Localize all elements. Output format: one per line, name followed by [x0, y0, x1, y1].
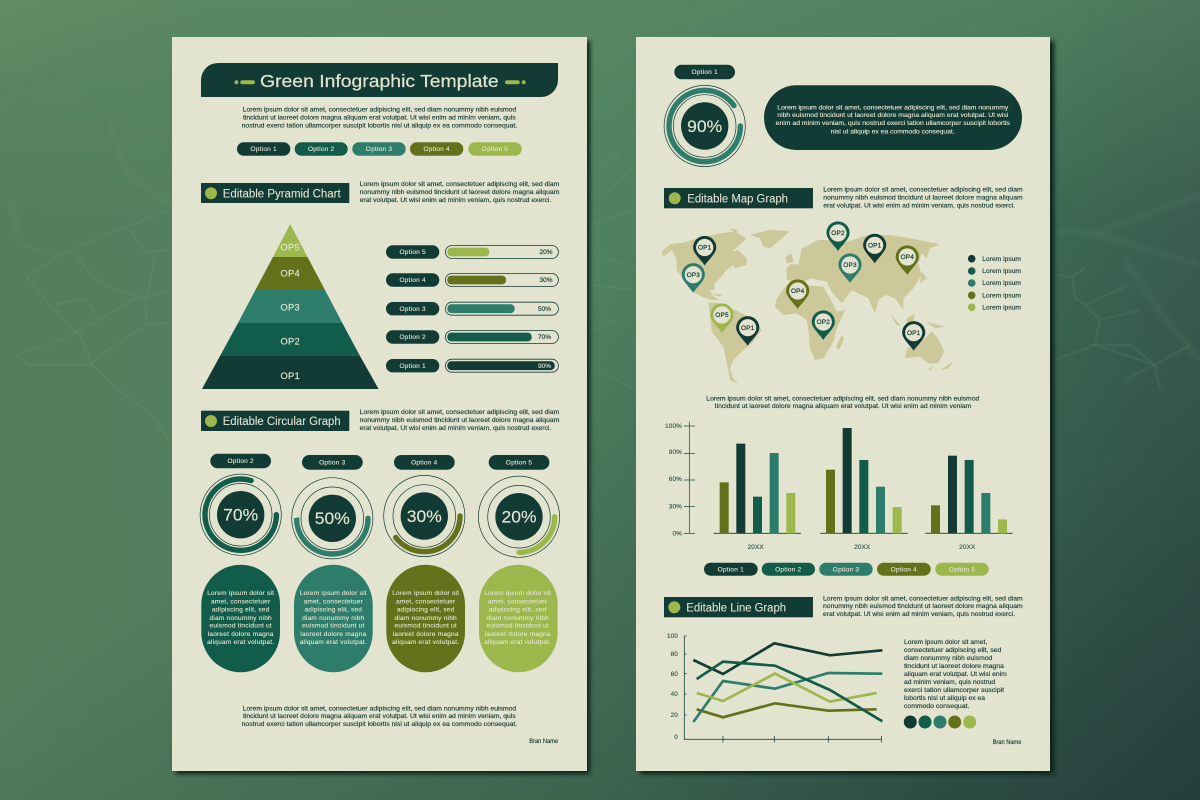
text capsule: teal: [294, 565, 373, 672]
pyramid description: nonummy nibh euismod tincidunt ut laoreet dolore magna aliquam: [360, 189, 559, 196]
text capsule: olive: adipiscing elit, sed: [397, 607, 455, 614]
text capsule: olive: aliquam erat volutpat.: [392, 639, 459, 646]
option legend row: Option 3: [366, 146, 392, 153]
dark text capsule: Lorem ipsum dolor sit amet, consectetuer adipiscing elit, sed diam nonummy: [777, 104, 1009, 111]
map pin: OP1 siberia: OP1: [868, 243, 882, 250]
circular gauge: option 4: Option 4: [411, 460, 438, 466]
closing text: tincidunt ut laoreet dolore magna aliquam erat volutpat. Ut wisi enim ad minim veniam, quis: [243, 713, 516, 720]
map description: [823, 186, 1023, 210]
bar chart option legend: Option 1: [718, 566, 744, 573]
map description: nonummy nibh euismod tincidunt ut laoreet dolore magna aliquam: [823, 194, 1023, 202]
text capsule: teal: adipiscing elit, sed: [304, 607, 362, 614]
circular gauge: option 5: 20%: [502, 509, 537, 527]
text capsule: teal: amet, consectetuer: [304, 598, 364, 605]
text capsule: lime: laoreet dolore magna: [485, 631, 551, 638]
map legend: Lorem ipsum: [982, 304, 1021, 312]
line graph side text: lobortis nisl ut aliquip ex ea: [904, 695, 985, 702]
line graph: 80: [671, 651, 678, 658]
bar chart option legend: [704, 563, 989, 576]
progress bars: Option 4: [399, 277, 426, 284]
brand name right: Bran Name: [993, 739, 1022, 746]
map pin: OP2 russia west: [826, 221, 850, 251]
bar chart option legend: Option 5: [949, 566, 975, 573]
map pin: OP1 australia: [902, 321, 925, 351]
bar chart: 60%: [669, 476, 682, 483]
map description: erat volutpat. Ut wisi enim ad minim veniam, quis nostrud exerci.: [823, 202, 1015, 210]
map pin: OP3 central asia: OP3: [843, 262, 857, 269]
line graph side text: diam nonummy nibh euismod: [904, 655, 993, 662]
line graph description: nonummy nibh euismod tincidunt ut laoreet dolore magna aliquam: [823, 603, 1023, 610]
text capsule: lime: euismod tincidunt ut: [486, 623, 549, 630]
world map: [662, 228, 953, 383]
circular description: erat volutpat. Ut wisi enim ad minim veniam, quis nostrud exerci.: [360, 425, 551, 432]
text capsule: lime: amet, consectetuer: [488, 598, 548, 605]
circular gauge: option 2: 70%: [223, 507, 259, 525]
line graph side text: [904, 639, 1007, 710]
text capsule: dark green: [201, 565, 280, 672]
text capsule: olive: amet, consectetuer: [396, 598, 456, 605]
line graph: 0: [674, 734, 678, 741]
closing text: [242, 705, 517, 728]
map pin: OP1 australia: OP1: [907, 330, 921, 337]
text capsule: dark green: amet, consectetuer: [211, 598, 271, 605]
line graph: [667, 633, 882, 742]
circular description: nonummy nibh euismod tincidunt ut laoreet dolore magna aliquam: [360, 417, 559, 424]
page 1 shadow: [176, 41, 590, 774]
circular gauge: option 2: [200, 454, 281, 555]
line graph side text: exerci tation ullamcorper suscipit: [904, 687, 1004, 694]
text capsule: dark green: Lorem ipsum dolor sit: [207, 590, 274, 597]
progress bars: 70%: [538, 334, 551, 341]
circular gauge: option 1: Option 1: [691, 69, 718, 76]
circular gauge: option 5: Option 5: [506, 460, 532, 466]
map description: Lorem ipsum dolor sit amet, consectetuer adipiscing elit, sed diam: [823, 186, 1023, 194]
map pin: OP4 north africa: [786, 279, 809, 309]
text capsule: dark green: aliquam erat volutpat.: [207, 639, 274, 646]
pyramid chart: [202, 224, 379, 389]
circular gauge: option 2: Option 2: [227, 458, 254, 465]
text capsule: lime: [479, 565, 558, 672]
text capsule: dark green: laoreet dolore magna: [208, 631, 274, 638]
progress bars: Option 2: [399, 334, 426, 341]
option legend row: [237, 142, 522, 156]
heading: pyramid chart: [201, 183, 349, 203]
text capsule: olive: Lorem ipsum dolor sit: [392, 590, 459, 597]
circular description: Lorem ipsum dolor sit amet, consectetuer adipiscing elit, sed diam: [360, 409, 559, 416]
option legend row: Option 4: [423, 146, 450, 153]
text capsule: olive: laoreet dolore magna: [393, 631, 459, 638]
line graph: 20: [671, 712, 678, 719]
text capsule: olive: diam nonummy nibh: [394, 615, 457, 622]
circular gauge: option 5: [478, 455, 560, 557]
map pin: OP3 west america: OP3: [687, 272, 700, 279]
brand name left: Bran Name: [529, 738, 558, 745]
line graph description: erat volutpat. Ut wisi enim ad minim veniam, quis nostrud exerci.: [823, 611, 1015, 618]
progress bars: Option 1: [399, 363, 426, 370]
closing text: Lorem ipsum dolor sit amet, consectetuer adipiscing elit, sed diam nonummy nibh euismod: [243, 705, 517, 712]
line graph: 60: [671, 671, 678, 678]
pyramid chart: OP5: [281, 242, 300, 253]
pyramid chart: OP4: [281, 267, 300, 278]
line graph side text: aliquam erat volutpat. Ut wisi enim: [904, 671, 1007, 678]
pyramid description: erat volutpat. Ut wisi enim ad minim veniam, quis nostrud exerci.: [360, 197, 551, 204]
map pin: OP1 siberia: [863, 234, 886, 263]
line graph side text: commodo consequat.: [904, 703, 969, 710]
map pin: OP4 north africa: OP4: [791, 288, 805, 295]
circular gauge: option 3: Option 3: [319, 460, 346, 466]
text capsule: teal: aliquam erat volutpat.: [300, 639, 367, 646]
text capsule: lime: Lorem ipsum dolor sit: [484, 590, 551, 597]
text capsule: olive: euismod tincidunt ut: [394, 623, 457, 630]
line graph description: Lorem ipsum dolor sit amet, consectetuer adipiscing elit, sed diam: [823, 596, 1023, 602]
progress bars: Option 3: [399, 306, 426, 313]
option legend row: Option 5: [482, 146, 508, 153]
heading: line graph: Editable Line Graph: [686, 602, 786, 614]
circular description: [360, 409, 559, 432]
map pin: OP4 east asia: OP4: [901, 254, 914, 261]
closing text: nostrud exerci tation ullamcorper suscipit lobortis nisl ut aliquip ex ea commodo consequat.: [242, 721, 517, 728]
dark text capsule: enim ad minim veniam, quis nostrud exerci tation ullamcorper suscipit lobortis: [776, 120, 1011, 127]
page 2: right poster: [636, 37, 1050, 771]
bar chart: 90%: [669, 449, 682, 456]
intro text: tincidunt ut laoreet dolore magna aliquam erat volutpat. Ut wisi enim ad minim veniam, quis: [243, 115, 516, 122]
line graph side text: Lorem ipsum dolor sit amet,: [904, 639, 987, 646]
text capsule: teal: diam nonummy nibh: [302, 615, 365, 622]
line graph side text: tincidunt ut laoreet dolore magna: [904, 663, 1004, 670]
heading: line graph: [664, 597, 813, 617]
progress bars: 50%: [538, 306, 551, 313]
heading: circular graph: Editable Circular Graph: [223, 416, 341, 428]
map pin: OP1 brazil: [736, 316, 759, 346]
progress bars: 90%: [538, 363, 551, 370]
colour swatches: [904, 716, 976, 728]
line graph side text: consectetuer adipiscing elit, sed: [904, 647, 1002, 654]
title banner: [201, 63, 558, 97]
circular gauge: option 1: [664, 65, 745, 167]
map pin: OP2 central africa: [812, 310, 835, 340]
progress bars: Option 5: [399, 249, 426, 256]
circular gauge: option 3: [292, 455, 373, 559]
map legend: Lorem ipsum: [982, 256, 1021, 263]
progress bars: 30%: [539, 277, 553, 284]
bar chart description: tincidunt ut laoreet dolore magna aliquam erat volutpat. Ut wisi enim ad minim veniam: [715, 403, 971, 410]
page 1: left poster: [172, 37, 587, 771]
map legend: Lorem ipsum: [982, 268, 1021, 275]
text capsule: dark green: adipiscing elit, sed: [212, 607, 270, 614]
bar chart: [665, 422, 1013, 551]
map pin: OP1 brazil: OP1: [741, 325, 755, 332]
heading: map graph: Editable Map Graph: [687, 193, 788, 205]
pyramid chart: OP1: [281, 370, 300, 381]
text capsule: lime: diam nonummy nibh: [486, 615, 549, 622]
circular gauge: option 3: 50%: [315, 510, 350, 528]
intro text: Lorem ipsum dolor sit amet, consectetuer adipiscing elit, sed diam nonummy nibh euismod: [243, 106, 517, 113]
heading: circular graph: [201, 411, 349, 431]
text capsule: dark green: euismod tincidunt ut: [209, 623, 272, 630]
line graph: 40: [671, 691, 678, 698]
map pin: OP2 central africa: OP2: [817, 319, 830, 326]
map pin: OP1 north america: [693, 236, 716, 266]
pyramid description: Lorem ipsum dolor sit amet, consectetuer adipiscing elit, sed diam: [360, 181, 559, 188]
map pin: OP4 east asia: [896, 245, 919, 275]
pyramid chart: OP2: [281, 335, 300, 346]
map pin: OP5 south america: [710, 303, 734, 333]
map pin: OP3 west america: [682, 263, 705, 293]
dark text capsule: nibh euismod tincidunt ut laoreet dolore magna aliquam erat volutpat. Ut wisi: [777, 112, 1008, 119]
option legend row: Option 1: [250, 146, 277, 153]
text capsule: teal: euismod tincidunt ut: [302, 623, 365, 630]
line graph side text: ad minim veniam, quis nostrud: [904, 679, 996, 686]
text capsule: lime: adipiscing elit, sed: [489, 607, 547, 614]
circular gauge: option 4: [384, 455, 465, 557]
bar chart: 100%: [665, 423, 682, 430]
pyramid chart: OP3: [281, 302, 300, 313]
bar chart: 30%: [669, 504, 682, 510]
heading: pyramid chart: Editable Pyramid Chart: [223, 188, 341, 200]
map pin: OP1 north america: OP1: [698, 245, 712, 252]
text capsule: teal: Lorem ipsum dolor sit: [300, 590, 367, 597]
map pin: OP2 russia west: OP2: [831, 230, 845, 237]
intro text: nostrud exerci tation ullamcorper suscipit lobortis nisl ut aliquip ex ea commodo consequat.: [242, 123, 517, 130]
bar chart: 0%: [672, 530, 682, 538]
intro text: [242, 106, 517, 130]
heading: map graph: [664, 188, 813, 208]
text capsule: teal: laoreet dolore magna: [300, 631, 366, 638]
map legend: [968, 255, 1021, 312]
pyramid description: [360, 181, 559, 204]
circular gauge: option 4: 30%: [407, 508, 442, 526]
map legend: Lorem ipsum: [982, 280, 1021, 287]
bar chart: 20XX: [748, 544, 764, 551]
bar chart: 20XX: [959, 544, 976, 551]
text capsule: lime: aliquam erat volutpat.: [484, 639, 551, 646]
progress bars: 20%: [539, 249, 553, 256]
progress bars: [386, 245, 558, 372]
line graph: 100: [667, 633, 678, 640]
bar chart option legend: Option 2: [775, 566, 802, 573]
bar chart: 20XX: [854, 544, 871, 551]
bar chart option legend: Option 4: [891, 566, 917, 573]
map pin: OP5 south america: OP5: [715, 312, 729, 319]
page 2 shadow: [640, 41, 1054, 774]
option legend row: Option 2: [308, 146, 335, 153]
title banner: Green Infographic Template: [260, 71, 499, 91]
bar chart description: [706, 396, 980, 410]
bar chart description: Lorem ipsum dolor sit amet, consectetuer adipiscing elit, sed diam nonummy nibh euismod: [706, 396, 980, 402]
bar chart option legend: Option 3: [833, 566, 859, 573]
circular gauge: option 1: 90%: [687, 118, 723, 136]
map pin: OP3 central asia: [838, 253, 862, 283]
map legend: Lorem ipsum: [982, 292, 1021, 300]
text capsule: dark green: diam nonummy nibh: [209, 615, 272, 622]
text capsule: olive: [386, 565, 465, 672]
dark text capsule: [764, 85, 1022, 150]
dark text capsule: nisl ut aliquip ex ea commodo consequat.: [831, 128, 955, 135]
line graph description: [823, 596, 1023, 618]
